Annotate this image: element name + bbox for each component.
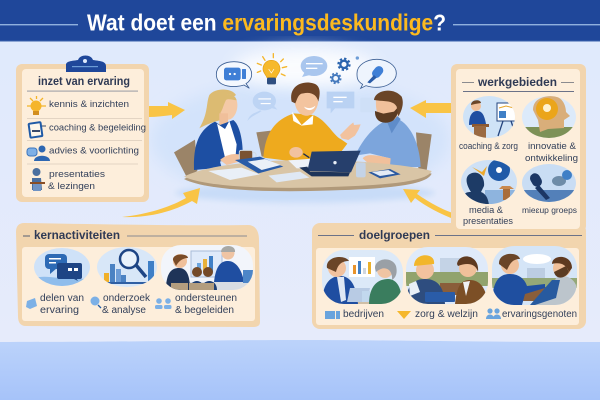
icon: checklist bbox=[29, 122, 46, 138]
label: ervaringsgenoten: ervaringsgenoten bbox=[502, 309, 577, 320]
label: ondersteunen & begeleiden: & begeleiden bbox=[175, 305, 234, 316]
illustration: charts and magnifier bbox=[97, 247, 157, 287]
icon: bulb bbox=[27, 96, 46, 115]
table bbox=[184, 160, 432, 191]
panel: werkgebieden bbox=[451, 64, 586, 232]
icon: folded note bbox=[26, 298, 37, 309]
laptop bbox=[299, 151, 361, 176]
illustration: media head and bubble bbox=[461, 160, 517, 204]
icon: heart shape bbox=[397, 311, 411, 319]
header banner bbox=[0, 0, 600, 42]
label: bedrijven: bedrijven bbox=[343, 309, 384, 320]
panel: doelgroepen bbox=[312, 223, 586, 329]
icon: building bbox=[325, 311, 340, 319]
row text: kennis: kennis & inzichten bbox=[49, 99, 129, 110]
label: coaching & zorg: coaching & zorg bbox=[459, 141, 518, 151]
illustration: worker and manager bbox=[406, 247, 488, 304]
illustration: microphone scene bbox=[522, 164, 576, 202]
icon: presenter at lectern bbox=[30, 168, 45, 191]
bottom band bbox=[0, 340, 600, 400]
person: man in yellow sweater bbox=[263, 82, 361, 161]
documents and folder on table bbox=[208, 157, 401, 182]
row text: coaching: coaching & begeleiding bbox=[49, 122, 146, 134]
person: man in light blue shirt bbox=[355, 91, 421, 167]
row text: advies: advies & voorlichting bbox=[49, 146, 139, 156]
label: ondersteunen & begeleiden: ondersteunen bbox=[175, 293, 237, 304]
label: onderzoek & analyse bbox=[102, 293, 151, 316]
heading: werkgebieden: werkgebieden bbox=[477, 75, 557, 89]
chairs bbox=[174, 131, 432, 177]
glass jar bbox=[356, 162, 366, 177]
icon: microphone bubble bbox=[357, 59, 396, 88]
illustration: meeting with adviser bbox=[161, 245, 253, 290]
icon: speech bubble bbox=[301, 56, 327, 77]
arrow: doelgroepen to centre bbox=[403, 189, 456, 220]
illustration: innovation head with bulb bbox=[522, 96, 576, 138]
label: mieɛup groeps: mieɛup groeps bbox=[522, 205, 577, 215]
person: woman in blue blazer bbox=[194, 89, 256, 170]
arrow: inzet to centre bbox=[149, 102, 185, 119]
title: Wat doet een ervaringsdeskundige? bbox=[87, 10, 446, 36]
row text: presentaties: presentaties bbox=[49, 169, 105, 180]
label: onderzoek & analyse: onderzoek bbox=[103, 293, 151, 304]
illustration: peers on bench bbox=[492, 246, 577, 305]
heading: kernactiviteiten: kernactiviteiten bbox=[34, 228, 120, 242]
label: innovatie &: innovatie & bbox=[528, 141, 577, 152]
label: onderzoek & analyse: & analyse bbox=[102, 305, 146, 316]
label: delen van ervaring: delen van bbox=[40, 293, 84, 304]
illustration: chat bubbles bbox=[34, 248, 90, 286]
icon: clipboard clip bbox=[66, 56, 106, 72]
icon: magnifier bbox=[90, 296, 101, 308]
central scene: meeting at table bbox=[174, 54, 432, 191]
icon: gears bbox=[331, 56, 359, 83]
heading: doelgroepen: doelgroepen bbox=[359, 228, 430, 242]
icon: light bulb bbox=[257, 54, 287, 84]
icon: two people bbox=[155, 298, 172, 309]
row text: lezingen: & lezingen bbox=[48, 181, 95, 192]
icon: peers bbox=[486, 308, 501, 319]
central backdrop swoosh bbox=[150, 48, 450, 202]
arrow: kernactiviteiten to centre bbox=[122, 188, 200, 217]
label: ontwikkeling: ontwikkeling bbox=[525, 153, 578, 164]
icon: video chat bubble bbox=[216, 62, 252, 88]
label: media &: media & bbox=[469, 205, 504, 216]
label: ondersteunen & begeleiden bbox=[175, 293, 237, 316]
label: delen van ervaring: ervaring bbox=[40, 305, 79, 316]
arrow: werkgebieden to centre bbox=[410, 100, 452, 118]
illustration: consultant and older woman bbox=[322, 250, 403, 304]
heading: inzet van ervaring: inzet van ervaring bbox=[38, 76, 130, 88]
panel: kernactiviteiten bbox=[16, 223, 260, 327]
faded chat bubbles bbox=[247, 92, 376, 121]
label: delen van ervaring bbox=[40, 293, 84, 316]
icon: advice people bbox=[27, 146, 50, 161]
panel: inzet van ervaring bbox=[16, 56, 149, 202]
illustration: coaching presenter bbox=[463, 96, 515, 138]
label: presentaties: presentaties bbox=[463, 216, 513, 227]
label: zorg & welzijn: zorg & welzijn bbox=[415, 309, 478, 320]
